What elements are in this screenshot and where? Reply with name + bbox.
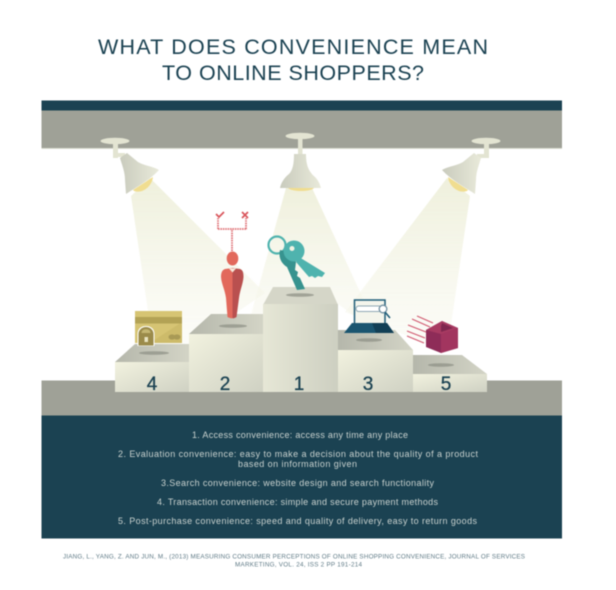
definition list: 3.Search convenience: website design and search functionality: [161, 478, 434, 488]
citation: JIANG, L., YANG, Z. AND JUN, M., (2013) MEASURING CONSUMER PERCEPTIONS OF ONLINE SHOPPING CONVENIENCE, JOURNAL OF SERVICES: [63, 554, 525, 560]
ceiling band: [42, 100, 562, 149]
podium 4: [115, 344, 189, 395]
title: TO ONLINE SHOPPERS?: [162, 61, 424, 85]
definition list: [118, 430, 478, 526]
icon: keys: [268, 236, 325, 290]
definition list: based on information given: [238, 459, 357, 469]
podium 2: [189, 314, 263, 395]
light beams: [131, 178, 470, 352]
title: [98, 35, 488, 85]
podium 3: [338, 330, 413, 395]
rank number 3: 3: [363, 374, 373, 395]
rank number 1: 1: [294, 374, 304, 395]
citation: MARKETING, VOL. 24, ISS 2 PP 191-214: [235, 562, 362, 568]
rank number 4: 4: [147, 374, 158, 395]
lamp: left: [100, 138, 159, 194]
icon: person with decision tree: [216, 212, 248, 318]
icon: credit card with padlock: [135, 311, 182, 346]
check and cross marks: [216, 212, 248, 218]
icon: delivery box with speed lines: [407, 316, 458, 353]
rank number 2: 2: [220, 374, 230, 395]
title: WHAT DOES CONVENIENCE MEAN: [98, 35, 488, 59]
lamp: right: [442, 138, 500, 194]
definition list: 2. Evaluation convenience: easy to make a decision about the quality of a product: [118, 449, 478, 459]
decision tree: [218, 218, 247, 251]
icon: laptop with search bar: [344, 300, 394, 333]
definition list: 5. Post-purchase convenience: speed and quality of delivery, easy to return goods: [118, 516, 478, 526]
podium 5: [413, 355, 487, 395]
podium 1: [263, 287, 338, 395]
panel: convenience definitions: [42, 416, 562, 538]
definition list: 1. Access convenience: access any time any place: [192, 430, 408, 440]
floor band: [42, 380, 562, 416]
citation: [63, 554, 525, 568]
definition list: 4. Transaction convenience: simple and secure payment methods: [157, 497, 438, 507]
lamp: centre: [280, 133, 321, 191]
rank number 5: 5: [441, 374, 451, 395]
